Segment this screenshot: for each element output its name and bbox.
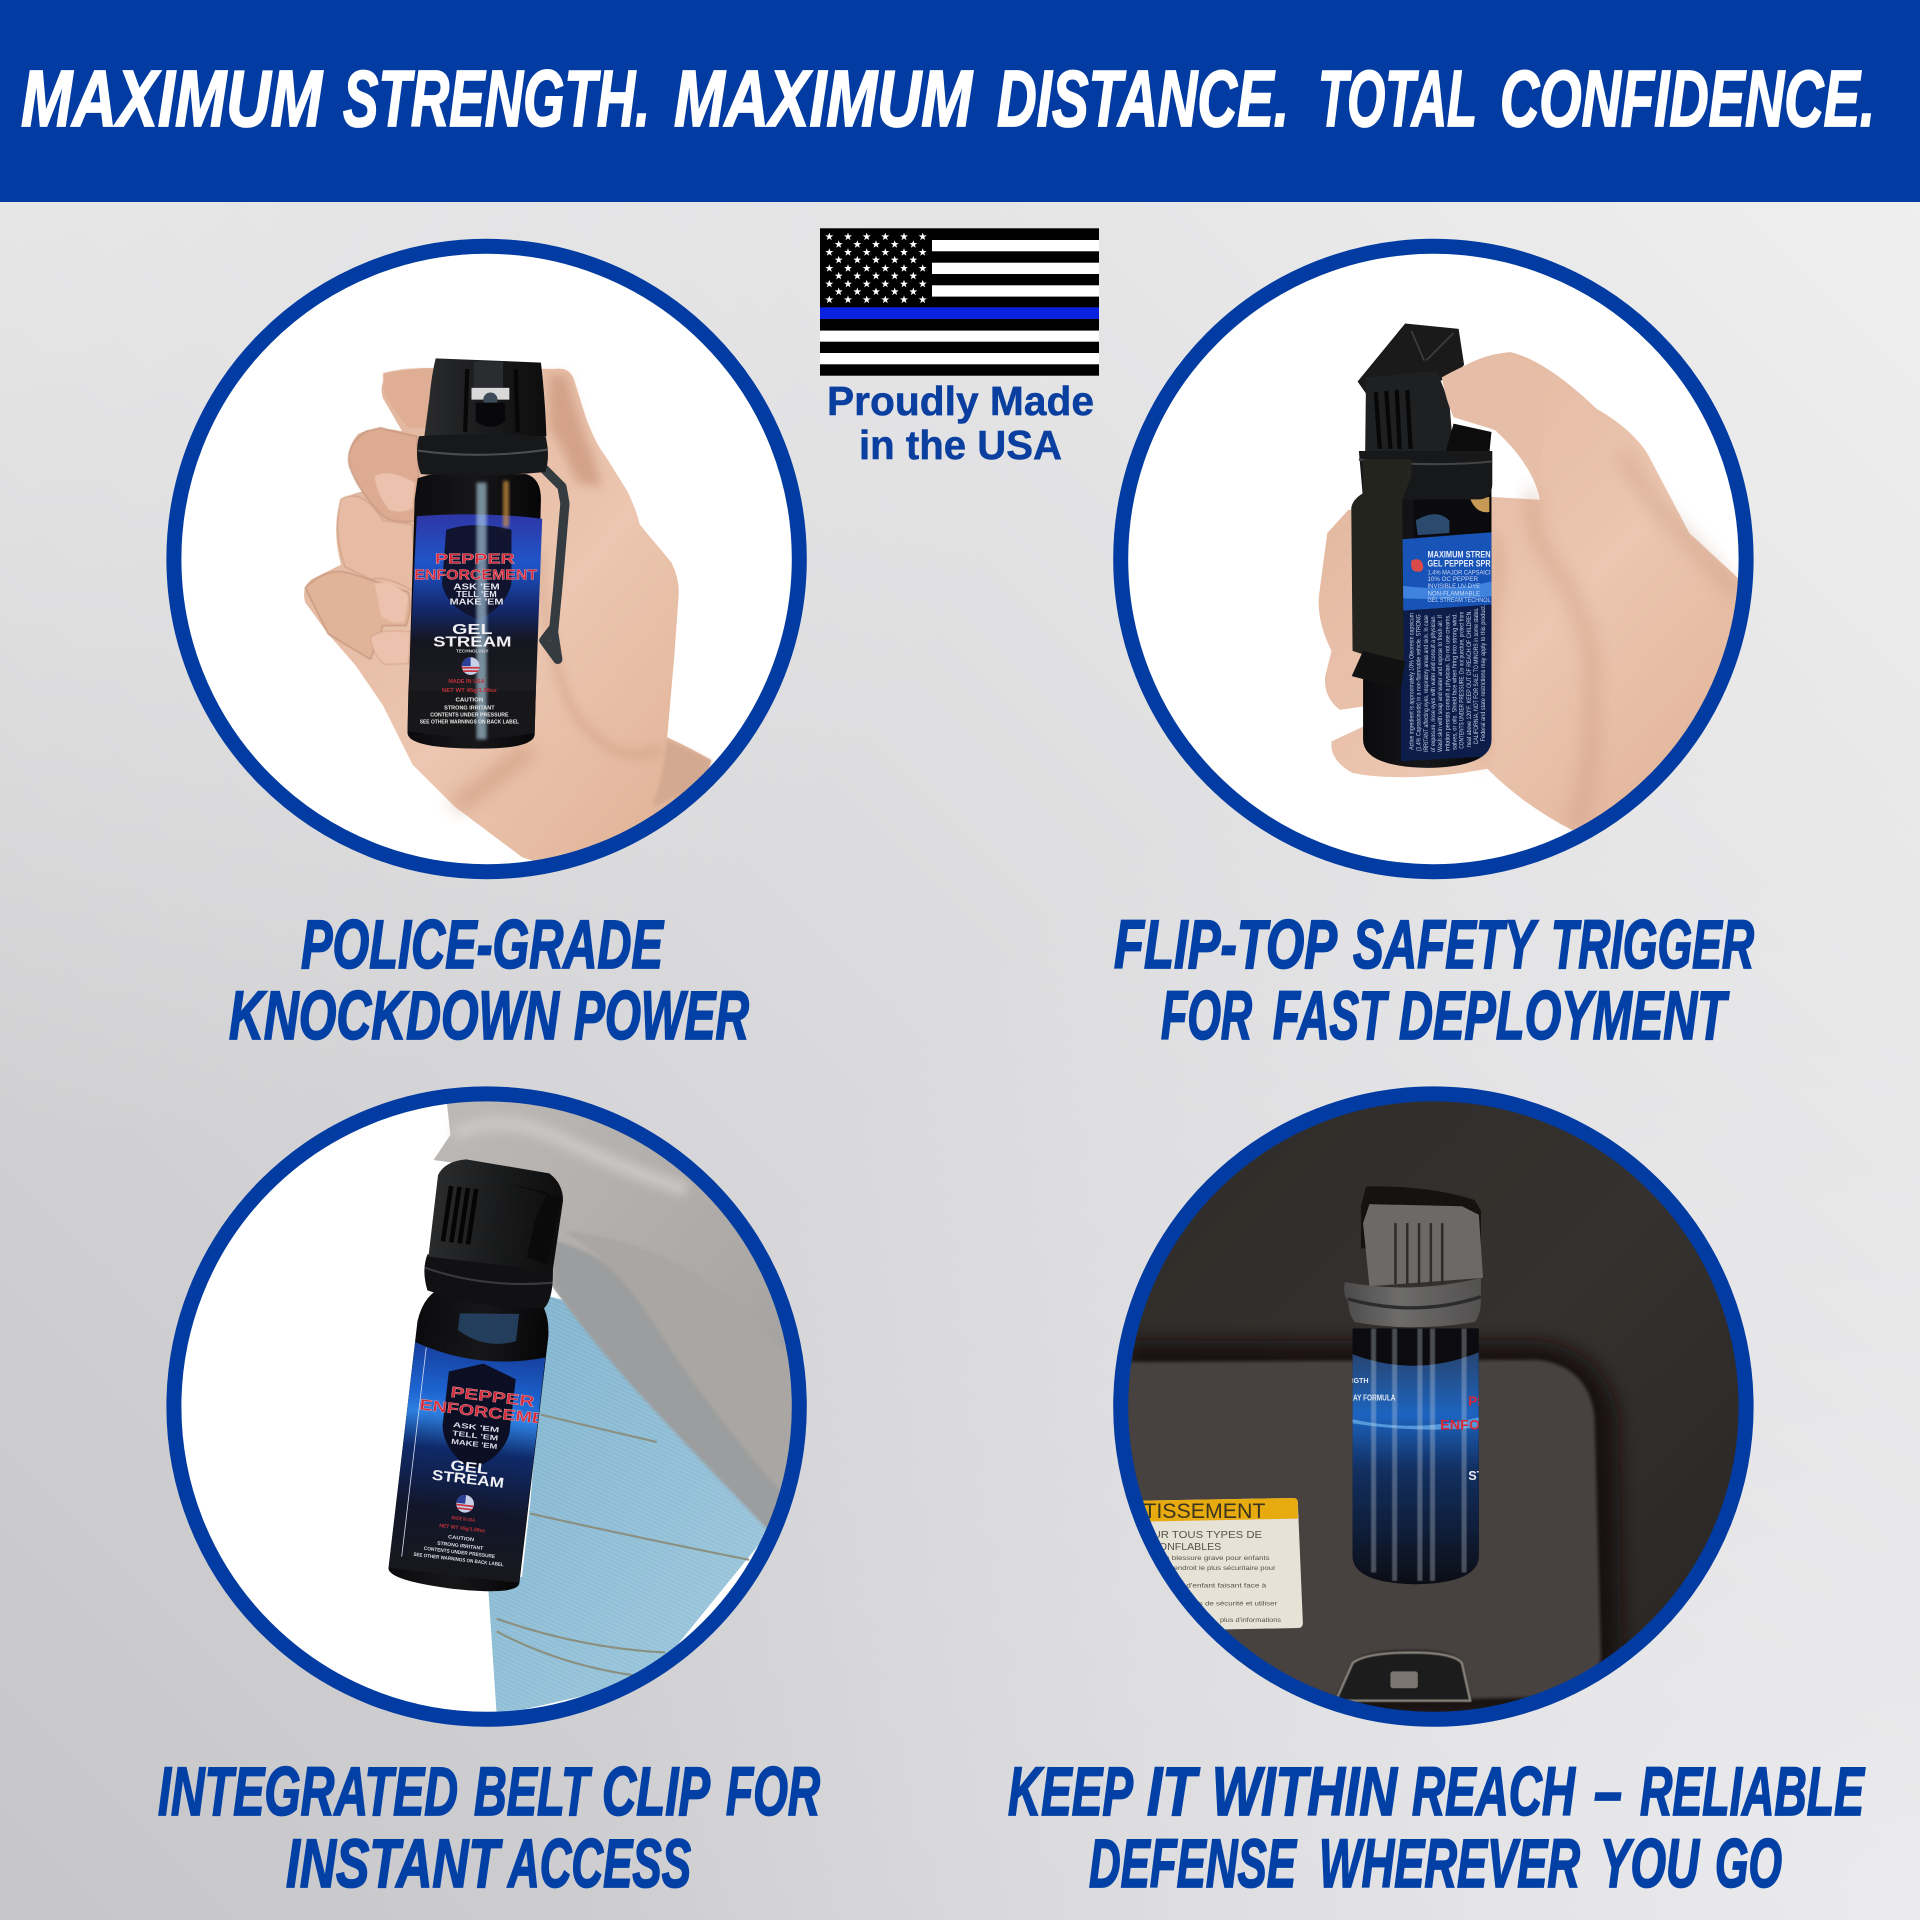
canister: CONTENTS UNDER PRESSURE [423,1546,496,1560]
canister: TECHNOLOGY [456,649,490,654]
canister: PEPPER [435,550,515,567]
canister: NON-FLAMMABLE [1427,590,1480,597]
warning sticker: s de sécurité et utiliser [1199,1600,1277,1607]
caption: CLIP [602,1753,711,1830]
canister: CALIFORNIA, NOT FOR SALE TO MINORS in some states. [1473,607,1480,744]
canister: NGTH [1348,1377,1369,1385]
warning sticker: plus d'informations [1220,1617,1281,1624]
canister [1363,483,1491,768]
made in USA text: in the USA [859,422,1062,468]
ring [174,246,799,872]
canister: GEL PEPPER SPR [1427,559,1491,569]
title [21,54,1875,143]
icon: thin blue line flag [820,228,1099,376]
belt clip [541,466,565,659]
caption: REACH [1412,1753,1576,1830]
caption: – [1594,1753,1622,1830]
canister [408,358,548,749]
grey shirt [434,1101,792,1530]
made in USA text: Proudly Made [827,378,1094,424]
canister: INVISIBLE UV DYE [1427,583,1480,590]
caption: TRIGGER [1551,906,1754,983]
caption: ACCESS [507,1825,691,1902]
photo: canister on car visor [1128,1101,1739,1712]
canister: PEPPER [450,1384,535,1411]
canister: MADE IN USA [448,679,485,685]
canister: irritation persists consult a physician. Do not use creams, [1444,614,1451,751]
canister: CONTENTS UNDER PRESSURE [430,713,509,719]
caption: POLICE-GRADE [301,906,664,983]
canister: IRRITANT affecting eyes, respiratory areas and skin. In case [1423,615,1430,752]
canister: STRONG IRRITANT [437,1541,484,1552]
canister: heat above 120°F. KEEP OUT OF REACH OF CHILDREN. [1465,610,1473,747]
canister: MAKE 'EM [450,598,504,607]
canister: PE [1468,1394,1486,1409]
canister: GEL STREAM TECHNOL [1427,597,1491,604]
panel: flag and made in USA [820,228,1099,468]
warning sticker: d'enfant faisant face à [1186,1583,1267,1590]
canister: RAY FORMULA [1348,1393,1395,1403]
warning sticker: e blessure grave pour enfants [1165,1555,1270,1562]
canister: ENFORCEMENT [414,566,538,583]
caption: INSTANT [286,1825,503,1902]
canister: STRONG IRRITANT [444,705,496,711]
canister [1344,1186,1494,1585]
canister: NET WT 45g/1.59oz [442,688,497,694]
canister: CAUTION [455,697,484,703]
canister: ENFOR [1440,1417,1491,1432]
title: TOTAL [1318,54,1477,143]
canister: Active ingredient is approximately 10% Oleoresin capsicum [1409,613,1416,750]
photo: canister clipped to belt [181,1102,792,1712]
belt clip [1351,459,1411,689]
canister: SEE OTHER WARNINGS ON BACK LABEL [420,719,519,725]
canister: TELL 'EM [452,1429,499,1443]
panel: keep it within reach [1008,1080,1865,1902]
caption: WHEREVER [1319,1825,1580,1902]
title: MAXIMUM [21,54,324,143]
hand [1319,352,1757,832]
caption: WITHIN [1212,1753,1399,1830]
canister: MADE IN USA [451,1515,476,1524]
title: STRENGTH. [343,54,650,143]
hand [304,368,711,861]
warning sticker: endroit le plus sécuritaire pour [1174,1565,1276,1572]
canister: NET WT 45g/1.59oz [439,1523,486,1534]
caption: KEEP [1008,1753,1134,1830]
caption: FOR [1161,977,1252,1054]
caption [1008,1753,1865,1902]
made in USA text [827,378,1094,468]
header banner [0,0,1920,202]
ring [1121,246,1746,872]
canister: ASK 'EM [453,1421,500,1434]
canister: Wash skin with soap and water and expose to fresh air. If [1437,615,1444,752]
caption: DEFENSE [1089,1825,1297,1902]
panel: flip-top safety trigger [1114,246,1757,1054]
caption [229,906,749,1054]
caption [158,1753,820,1902]
caption [1114,906,1754,1054]
canister: ASK 'EM [453,582,500,591]
canister: MAXIMUM STREN [1427,549,1491,559]
caption: FAST [1273,977,1389,1054]
canister: Federal and state restrictions may apply to this product. [1480,604,1487,741]
canister: STREAM [431,1468,505,1492]
ring [174,1094,799,1719]
canister: TELL 'EM [456,590,497,599]
canister: of exposure, rinse eyes with water and consult a physician. [1430,615,1437,752]
canister: salves, or oils. Shield face when firing into strong wind. [1452,613,1459,750]
ring [1121,1094,1746,1719]
caption: KNOCKDOWN [229,977,561,1054]
caption: FOR [726,1753,820,1830]
warning sticker [1143,1498,1303,1630]
canister: CAUTION [448,1534,475,1543]
caption: GO [1715,1825,1782,1902]
title: DISTANCE. [997,54,1289,143]
title: MAXIMUM [674,54,974,143]
canister: STR [1468,1469,1494,1483]
warning sticker: ONFLABLES [1159,1542,1221,1553]
caption: DEPLOYMENT [1399,977,1729,1054]
caption: FLIP-TOP [1114,906,1338,983]
warning sticker: TISSEMENT [1143,1500,1266,1523]
photo: hand holding canister front [173,246,800,873]
canister: 1.4% MAJOR CAPSAICI [1427,569,1491,576]
canister: GEL [450,1458,489,1478]
photo: hand with flip-top open [1120,246,1757,873]
warning sticker: UR TOUS TYPES DE [1153,1530,1262,1541]
caption: YOU [1600,1825,1700,1902]
caption: SAFETY [1353,906,1539,983]
jeans [488,1296,767,1712]
caption: IT [1147,1753,1200,1830]
panel: police-grade knockdown power [173,246,800,1054]
canister: MAKE 'EM [451,1438,498,1451]
canister: GEL [452,622,493,638]
caption: BELT [474,1753,592,1830]
thumb overlap [1442,352,1511,431]
canister: SEE OTHER WARNINGS ON BACK LABEL [413,1552,504,1568]
panel: integrated belt clip [158,1072,842,1902]
canister: ENFORCEME [419,1396,546,1428]
flip-top lid [1358,323,1464,398]
canister [387,1156,574,1597]
caption: POWER [574,977,749,1054]
cap [1359,371,1492,499]
canister: (1.4% Capsaicinoids) in a non-flammable vehicle. STRONG [1416,614,1423,751]
canister: CONTENTS UNDER PRESSURE. Do not puncture, protect from [1459,612,1466,749]
canister: STREAM [433,635,511,651]
sun visor panel [1125,1341,1622,1737]
canister: 10% OC PEPPER [1427,576,1478,583]
caption: INTEGRATED [158,1753,458,1830]
